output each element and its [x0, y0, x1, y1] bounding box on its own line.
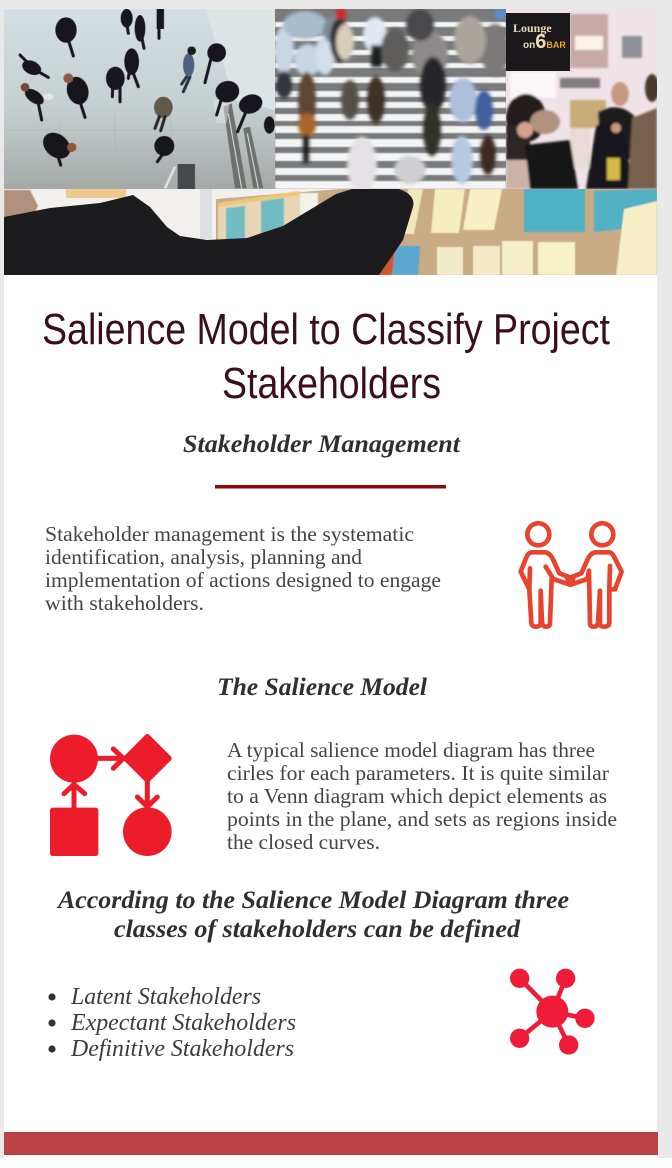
text block: stakeholder management definition: with stakeholders.: [45, 591, 204, 615]
list: stakeholder classes: Expectant Stakeholders: [70, 1009, 296, 1036]
icon: two people shaking hands: [521, 523, 622, 627]
icon: network nodes: [510, 969, 595, 1055]
photo: street signs and people: [506, 9, 659, 189]
list: stakeholder classes: Definitive Stakeholders: [70, 1035, 294, 1062]
text block: salience model description: points in the plane, and sets as regions inside: [227, 807, 617, 831]
text block: salience model description: cirles for each parameters. It is quite similar: [227, 761, 609, 785]
heading: Stakeholder Management: Stakeholder Management: [183, 431, 461, 458]
heading: three classes of stakeholders: According to the Salience Model Diagram three: [56, 887, 569, 914]
text block: stakeholder management definition: [45, 522, 441, 615]
title: Stakeholders: [222, 359, 441, 408]
heading: three classes of stakeholders: classes of stakeholders can be defined: [114, 916, 521, 943]
list: stakeholder classes: [48, 983, 296, 1062]
text block: stakeholder management definition: identification, analysis, planning and: [45, 545, 363, 569]
title: [42, 305, 610, 408]
sign: Lounge on 6 Bar: [506, 13, 570, 71]
photo: commuters from above: [4, 9, 275, 189]
list: stakeholder classes: Latent Stakeholders: [70, 983, 261, 1010]
text block: stakeholder management definition: Stakeholder management is the systematic: [45, 522, 414, 546]
photo: arm pointing at sticky notes: [4, 189, 657, 275]
photo: crowded zebra crossing: [274, 9, 509, 193]
text block: salience model description: to a Venn diagram which depict elements as: [227, 784, 607, 808]
footer bar: [4, 1132, 658, 1155]
dark sleeve: [4, 189, 413, 275]
heading: three classes of stakeholders: [56, 887, 569, 943]
sign: Lounge on 6 Bar: on6BAR: [523, 31, 566, 53]
text block: salience model description: the closed curves.: [227, 830, 380, 854]
text block: stakeholder management definition: implementation of actions designed to engage: [45, 568, 441, 592]
heading: The Salience Model: The Salience Model: [217, 674, 427, 701]
text block: salience model description: A typical salience model diagram has three: [227, 738, 595, 762]
sign: Lounge on 6 Bar: Lounge: [513, 21, 552, 35]
icon: flow diagram: [50, 733, 173, 856]
text block: salience model description: [227, 738, 617, 854]
